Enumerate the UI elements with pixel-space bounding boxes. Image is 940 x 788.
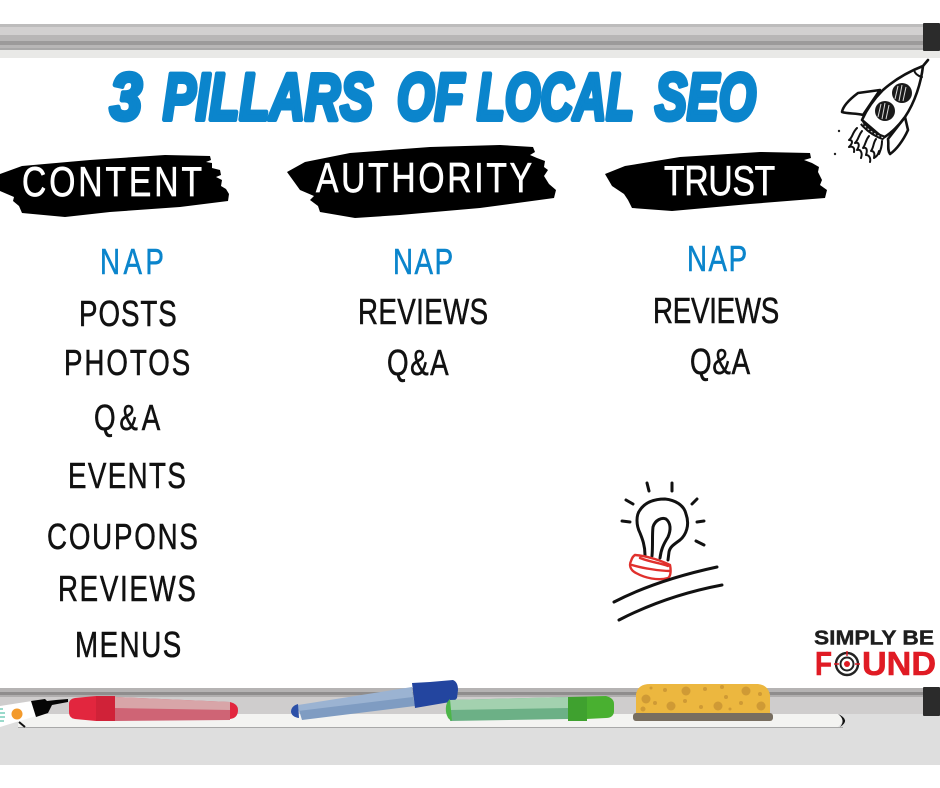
authority column list: REVIEWS xyxy=(358,292,488,332)
marker: green xyxy=(446,696,614,721)
content column list: NAP xyxy=(100,242,164,282)
title: SEO xyxy=(655,60,756,134)
content column list xyxy=(47,242,198,665)
authority column list xyxy=(358,242,488,383)
content column list: REVIEWS xyxy=(58,569,196,609)
trust column list: NAP xyxy=(687,239,747,279)
authority column list: Q&A xyxy=(387,343,449,383)
content column list: MENUS xyxy=(75,625,181,665)
marker: black xyxy=(0,699,68,727)
content column list: Q&A xyxy=(94,398,161,438)
marker: blue xyxy=(291,680,458,720)
bottom whiteboard tray xyxy=(0,687,940,765)
content column list: EVENTS xyxy=(68,456,186,496)
column heading: content xyxy=(0,155,229,217)
title: PILLARS xyxy=(163,60,373,134)
title: LOCAL xyxy=(477,60,634,134)
icon: light bulb xyxy=(614,483,722,620)
column heading: authority xyxy=(287,145,556,218)
logo: simply be found: UND xyxy=(862,645,936,682)
column heading: authority: AUTHORITY xyxy=(316,156,532,202)
column heading: content: CONTENT xyxy=(22,160,202,206)
content column list: COUPONS xyxy=(47,517,198,557)
authority column list: NAP xyxy=(393,242,453,282)
top whiteboard rail xyxy=(0,23,940,58)
title: 3 xyxy=(110,60,142,134)
column heading: trust xyxy=(605,152,827,211)
trust column list: REVIEWS xyxy=(653,291,779,331)
marker: red xyxy=(69,696,238,721)
icon: rocket xyxy=(834,60,928,162)
trust column list xyxy=(653,239,779,382)
title: OF xyxy=(397,60,465,134)
trust column list: Q&A xyxy=(690,342,751,382)
content column list: PHOTOS xyxy=(64,343,190,383)
column heading: trust: TRUST xyxy=(664,159,775,205)
logo: simply be found: F xyxy=(815,645,832,682)
logo: simply be found xyxy=(814,626,936,682)
title xyxy=(110,60,756,134)
content column list: POSTS xyxy=(79,294,177,334)
logo: simply be found: SIMPLY BE xyxy=(814,626,934,650)
eraser sponge xyxy=(633,684,773,721)
